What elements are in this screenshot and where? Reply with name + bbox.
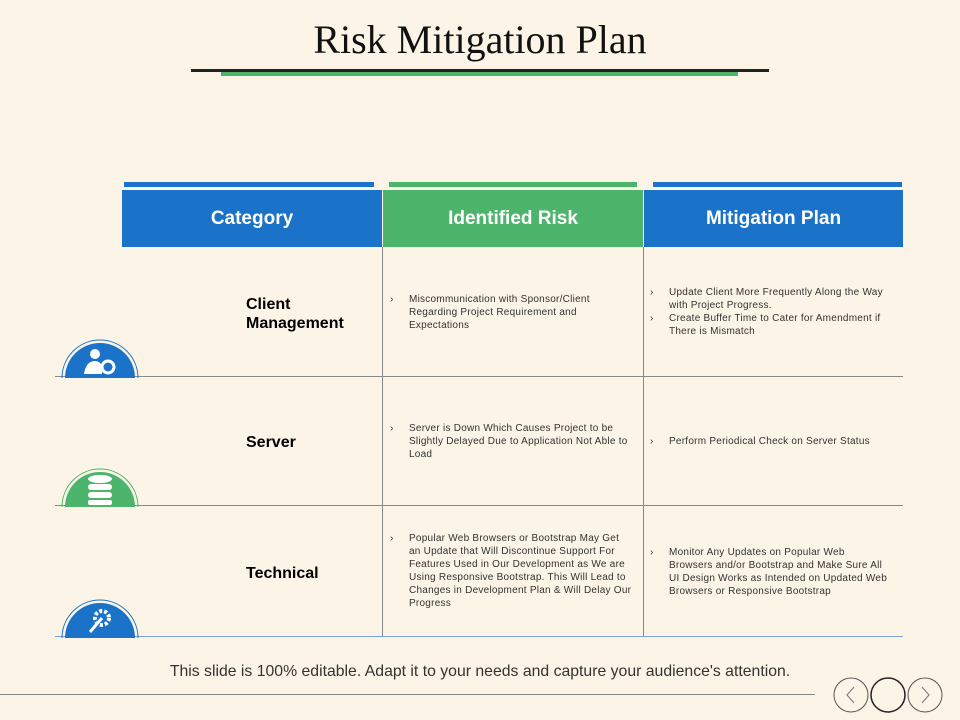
header: mitigation plan: Mitigation Plan	[706, 208, 841, 228]
risk 1	[390, 294, 590, 331]
risk 2: Slightly Delayed Due to Application Not Able to	[409, 436, 628, 447]
risk 1: Regarding Project Requirement and	[409, 307, 577, 318]
plan 2: Perform Periodical Check on Server Status	[669, 436, 870, 447]
risk 2: Load	[409, 449, 432, 460]
plan 1: There is Mismatch	[669, 326, 755, 337]
category: client management	[246, 296, 344, 332]
icon: technical	[62, 600, 138, 638]
plan 3: Monitor Any Updates on Popular Web	[669, 547, 845, 558]
plan 3: Browsers or Responsive Bootstrap	[669, 586, 831, 597]
header: identified risk: Identified Risk	[448, 208, 578, 228]
plan 1: with Project Progress.	[669, 300, 772, 311]
icon: client management	[62, 340, 138, 378]
category: client management: Client	[246, 296, 290, 313]
category: server: Server	[246, 434, 296, 451]
header: category	[122, 190, 382, 247]
risk 3: Popular Web Browsers or Bootstrap May Get	[409, 533, 619, 544]
plan 3	[650, 547, 887, 597]
plan 1: Create Buffer Time to Cater for Amendment if	[669, 313, 880, 324]
header: category: Category	[211, 208, 293, 228]
header: mitigation plan	[644, 190, 903, 247]
risk 1: Miscommunication with Sponsor/Client	[409, 294, 590, 305]
risk 3: Using Responsive Bootstrap. This Will Lead to	[409, 572, 626, 583]
category: client management: Management	[246, 315, 344, 332]
footer text: This slide is 100% editable. Adapt it to your needs and capture your audience's attention.	[170, 663, 790, 680]
plan 3: UI Design Works as Intended on Updated Web	[669, 573, 887, 584]
risk 3	[390, 533, 631, 609]
plan 3: Browsers and/or Bootstrap and Make Sure All	[669, 560, 882, 571]
plan 1: Update Client More Frequently Along the Way	[669, 287, 883, 298]
category: technical: Technical	[246, 565, 319, 582]
risk 3: Features Used in Our Development as We are	[409, 559, 625, 570]
table tabs	[124, 182, 902, 187]
plan 1	[650, 287, 883, 337]
icon: server	[62, 468, 138, 507]
risk 2: Server is Down Which Causes Project to be	[409, 423, 613, 434]
risk 3: an Update that Will Discontinue Support For	[409, 546, 615, 557]
risk 3: Progress	[409, 598, 451, 609]
risk 3: Changes in Development Plan & Will Delay Our	[409, 585, 631, 596]
risk 2	[390, 423, 628, 460]
header: identified risk	[383, 190, 643, 247]
nav buttons	[834, 677, 942, 713]
risk 1: Expectations	[409, 320, 469, 331]
title: Risk Mitigation Plan	[313, 17, 647, 62]
